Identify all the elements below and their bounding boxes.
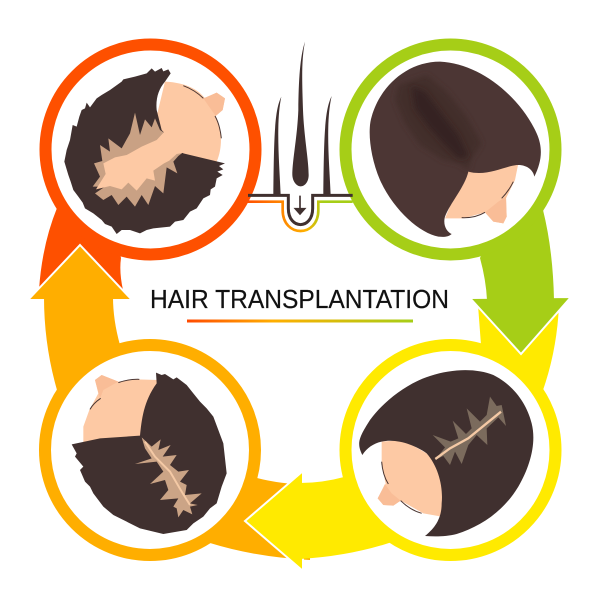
skin [445,163,518,223]
left hair [273,97,281,195]
right hair [323,96,332,195]
ring: yellow [346,345,556,555]
thinning patch [93,113,184,207]
scar shadow [433,397,506,465]
scar [135,437,202,517]
scalp [153,82,225,163]
skin [378,440,443,517]
ear [203,93,225,116]
scar line [435,412,501,459]
ring: red [46,44,256,254]
ear [95,375,118,398]
hair shadow band [395,75,482,170]
scar centre [145,442,190,505]
nose [485,197,507,223]
hair [359,370,533,536]
arrow: yellow left [245,471,400,571]
contour [90,379,139,409]
arrow: red, from step one ring to orange arrow [39,208,123,290]
scalp [83,375,158,444]
arrow: orange shaft to ring [210,478,310,560]
title underline [187,320,413,322]
head: full hair before [370,62,541,237]
bald patch [96,130,188,191]
contour [382,462,422,513]
contour [462,182,513,218]
hair [370,62,541,237]
icon: hair follicle [247,42,353,231]
title: HAIR TRANSPLANTATION [150,284,449,314]
nose [378,484,401,506]
gradient skin line [247,202,353,231]
hair [72,373,227,534]
head: transplant scar side view [359,370,533,536]
central hair [292,42,309,186]
head: balding scalp top view [64,68,225,234]
hair [64,68,225,234]
skin line [248,195,353,225]
hair parting [412,87,468,158]
ring: green [346,44,556,254]
arrow: yellow shaft to ring [478,305,559,420]
hairline contour [183,86,221,138]
down arrow [295,196,305,214]
head: transplant scar rear view [72,373,227,534]
arrow: green down [470,210,571,354]
ring: orange [45,345,255,555]
arrow: orange up [28,245,132,395]
